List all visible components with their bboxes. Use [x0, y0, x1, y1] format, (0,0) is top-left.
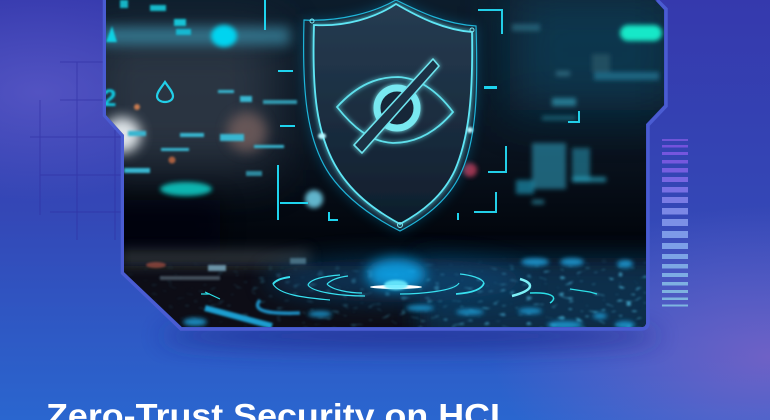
sharp cyan dashes [264, 0, 497, 221]
tech corner brackets right [474, 10, 579, 212]
shield [304, 0, 477, 231]
shield light flares [318, 127, 473, 139]
shield inner plate [314, 4, 472, 224]
holographic rings and light beam [201, 258, 597, 303]
shield body [304, 0, 477, 231]
decorative grid at left [30, 62, 124, 240]
icon: crossed-out eye [337, 59, 453, 153]
blurred data readouts right [512, 24, 659, 204]
shield rivets [310, 19, 474, 228]
number and drop glyphs: 2 [103, 85, 116, 112]
floor [124, 242, 646, 327]
blurred data streak top-left [100, 0, 290, 47]
panel: cyber security photo [90, 0, 680, 341]
number and drop glyphs [103, 82, 173, 112]
side tick bars [662, 139, 688, 306]
bokeh lights [103, 25, 662, 208]
panel border [104, 0, 666, 329]
shield glow [304, 0, 477, 231]
photo backdrop [90, 0, 680, 335]
blurred data readouts left [124, 90, 297, 176]
